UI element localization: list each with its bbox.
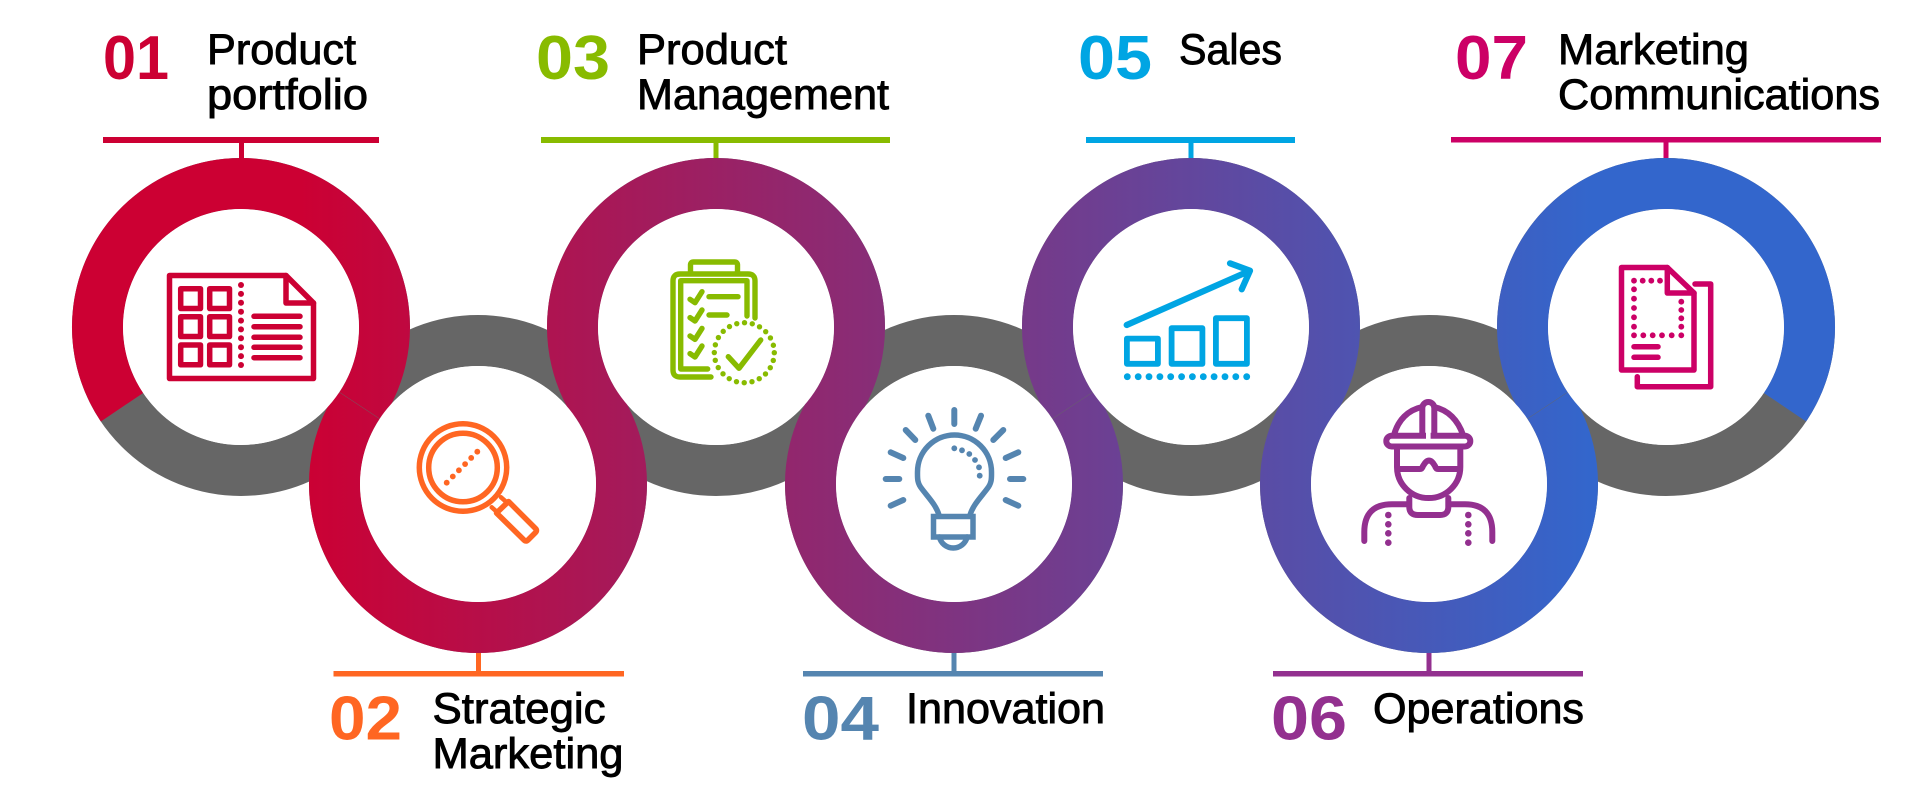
number 02: 02 xyxy=(329,684,402,754)
icon: worker with helmet xyxy=(1364,402,1492,546)
step 03: Product Management xyxy=(536,24,890,158)
title 04: Innovation xyxy=(906,685,1105,733)
title 05: Sales xyxy=(1179,26,1282,74)
step 06: Operations xyxy=(1271,653,1584,754)
step 05: Sales xyxy=(1078,24,1295,158)
icon: growth chart xyxy=(1124,263,1250,380)
step 01: Product portfolio xyxy=(103,24,379,158)
connector 02 xyxy=(334,653,624,676)
gray background rings xyxy=(98,184,1810,628)
step 07: Marketing Communications xyxy=(1451,24,1881,158)
title 01: portfolio xyxy=(207,71,368,119)
connector 03 xyxy=(541,137,890,158)
title 02: Marketing xyxy=(432,730,624,778)
connector 06 xyxy=(1273,653,1583,676)
icon: magnifying glass xyxy=(419,424,536,541)
icon: spreadsheet document xyxy=(170,276,314,378)
icon: checklist clipboard xyxy=(673,262,774,383)
connector 07 xyxy=(1451,137,1881,158)
title 07: Marketing xyxy=(1558,26,1749,74)
number 05: 05 xyxy=(1078,24,1152,93)
title 01: Product xyxy=(207,26,356,74)
title 03: Management xyxy=(637,71,889,119)
number 03: 03 xyxy=(536,24,610,93)
number 04: 04 xyxy=(802,684,880,754)
step 02: Strategic Marketing xyxy=(329,653,624,778)
white ring centers xyxy=(123,209,1784,602)
icon: light bulb xyxy=(886,410,1023,548)
number 01: 01 xyxy=(103,24,169,93)
title 02: Strategic xyxy=(432,685,606,733)
connector 01 xyxy=(103,137,379,158)
title 06: Operations xyxy=(1373,685,1584,733)
step 04: Innovation xyxy=(802,653,1105,754)
icon: copied documents xyxy=(1622,268,1711,387)
title 07: Communications xyxy=(1558,71,1880,119)
gradient wave band xyxy=(97,183,1810,628)
number 07: 07 xyxy=(1455,24,1528,93)
title 03: Product xyxy=(637,26,787,74)
connector 04 xyxy=(803,653,1103,676)
number 06: 06 xyxy=(1271,684,1347,754)
connector 05 xyxy=(1086,137,1295,158)
